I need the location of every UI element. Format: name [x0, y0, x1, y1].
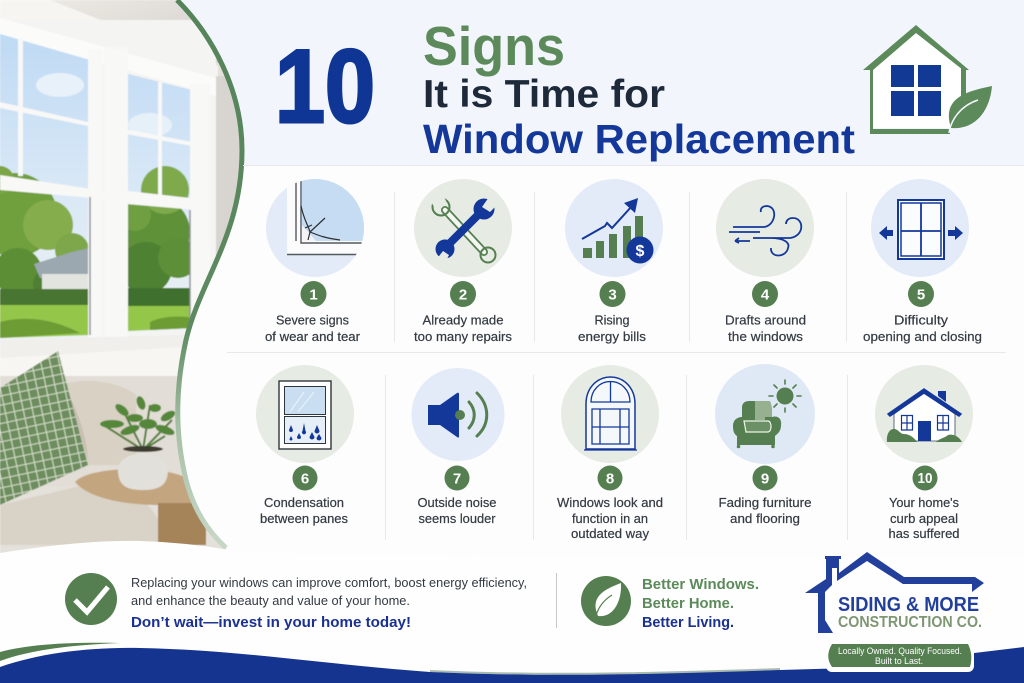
header rule: [243, 164, 1024, 166]
outdoor view through glass: [0, 34, 190, 288]
number badge 3: 3: [608, 286, 617, 304]
icon: house with leaf logo: [863, 25, 992, 134]
sofa cushion: [0, 485, 158, 545]
closing message: Don’t wait—invest in your home today!: [131, 614, 411, 631]
title line It is Time for: It is Time for: [423, 73, 665, 116]
icon: cracked window corner: [266, 175, 367, 277]
number badge 2: [450, 281, 476, 307]
number badge 5: [908, 281, 934, 307]
icon: house with bushes: [875, 365, 973, 463]
sofa arm: [62, 381, 136, 465]
caption 5: opening and closing: [863, 330, 982, 344]
green curve border: [177, 0, 242, 548]
caption 7: [418, 496, 497, 526]
number badge 6: [292, 466, 318, 490]
caption 10: has suffered: [888, 527, 960, 541]
number badge 8: 8: [606, 470, 614, 488]
photo: window and living room: [0, 0, 250, 560]
closing message: and enhance the beauty and value of your home.: [131, 594, 410, 608]
caption 9: Fading furniture: [718, 496, 812, 510]
window sashes and muntins: [0, 38, 210, 348]
caption 8: function in an: [572, 512, 648, 526]
number badge 5: 5: [917, 286, 925, 304]
icon: arched window: [561, 365, 659, 463]
slogan: Better Home.: [642, 596, 734, 612]
caption 8: outdated way: [571, 527, 650, 541]
caption 5: [863, 314, 982, 344]
icon: window with water droplets: [256, 365, 354, 463]
closing message: [131, 576, 527, 631]
caption 9: [718, 496, 812, 526]
number badge 7: [444, 466, 470, 490]
number badge 9: 9: [761, 470, 769, 488]
caption 3: [578, 314, 646, 344]
sign 2: repairs: [414, 179, 512, 344]
logo house outline: [805, 552, 984, 633]
sign 7: noise: [412, 368, 504, 526]
caption 4: Drafts around: [725, 314, 806, 328]
sign 8: outdated look: [557, 365, 663, 541]
number badge 7: 7: [453, 470, 461, 488]
caption 1: of wear and tear: [265, 330, 360, 344]
icon: leaf badge: [581, 576, 631, 626]
sign 9: fading furniture: [715, 364, 815, 526]
number badge 2: 2: [459, 286, 467, 304]
caption 7: seems louder: [418, 512, 496, 526]
caption 6: Condensation: [264, 496, 344, 510]
vertical footer divider: [556, 573, 558, 628]
icon: rising bars with dollar: $: [636, 243, 645, 260]
sign 1: wear and tear: [265, 175, 367, 344]
icon: rising bars with dollar: [565, 179, 663, 277]
pillow: [0, 351, 88, 505]
caption 3: energy bills: [578, 330, 646, 344]
logo tagline pill: Built to Last.: [875, 656, 923, 667]
logo tagline pill: Locally Owned. Quality Focused.: [838, 646, 962, 657]
caption 5: Difficulty: [894, 314, 949, 328]
number badge 6: 6: [301, 470, 309, 488]
number badge 9: [752, 466, 778, 490]
icon: speaker with sound waves: [412, 368, 504, 461]
closing message: Replacing your windows can improve comfort, boost energy efficiency,: [131, 576, 527, 590]
number badge 10: 10: [918, 470, 932, 487]
caption 1: [265, 314, 360, 344]
sign 3: energy bills: [565, 179, 663, 344]
window sill: [88, 337, 128, 348]
title number 10: 10: [275, 29, 375, 145]
company logo: [805, 552, 984, 672]
caption 2: too many repairs: [414, 330, 512, 344]
icon: crossed wrenches: [414, 179, 512, 277]
caption 4: the windows: [728, 330, 803, 344]
footer wave: thin grey-green accent: [430, 668, 780, 675]
logo tagline pill: [826, 642, 974, 672]
icon: green check badge: [65, 573, 117, 625]
icon: window with side arrows: [871, 179, 969, 277]
header background band: [170, 0, 1024, 165]
icon: wind lines: [716, 179, 814, 277]
number badge 4: 4: [761, 286, 770, 304]
number badge 10: [912, 466, 938, 490]
caption 1: Severe signs: [276, 314, 349, 328]
caption 9: and flooring: [730, 512, 800, 526]
caption 10: Your home's: [889, 496, 959, 510]
title: [275, 15, 855, 162]
slogan: [642, 577, 759, 631]
number badge 3: [600, 281, 626, 307]
caption 2: [414, 314, 512, 344]
number badge 8: [598, 466, 622, 490]
sign 6: condensation: [256, 365, 354, 526]
caption 7: Outside noise: [418, 496, 497, 510]
title word Signs: Signs: [423, 15, 565, 77]
caption 10: curb appeal: [890, 512, 958, 526]
slogan: Better Living.: [642, 615, 734, 631]
slogan: Better Windows.: [642, 577, 759, 593]
footer wave: green swoosh: [0, 643, 120, 661]
sign 10: curb appeal: [875, 365, 973, 541]
white lower panel: [0, 541, 1024, 683]
row and column dividers: [227, 192, 1006, 540]
footer wave: blue band: [0, 647, 1024, 683]
icon: armchair and sun: [715, 364, 815, 464]
title line Window Replacement: Window Replacement: [423, 116, 855, 162]
caption 6: [260, 496, 348, 526]
logo subtitle: CONSTRUCTION CO.: [838, 614, 982, 631]
caption 6: between panes: [260, 512, 348, 526]
caption 4: [725, 314, 806, 344]
sign 5: difficulty opening: [863, 179, 982, 344]
sign 4: drafts: [716, 179, 814, 344]
caption 10: [888, 496, 960, 541]
number badge 1: 1: [309, 286, 318, 304]
caption 8: [557, 496, 663, 541]
plant: [100, 395, 177, 450]
logo name: SIDING & MORE: [838, 594, 979, 616]
caption 8: Windows look and: [557, 496, 663, 510]
number badge 4: [752, 281, 778, 307]
caption 2: Already made: [422, 314, 504, 328]
caption 3: Rising: [594, 314, 630, 328]
number badge 1: [300, 281, 326, 307]
side table: [75, 469, 195, 505]
